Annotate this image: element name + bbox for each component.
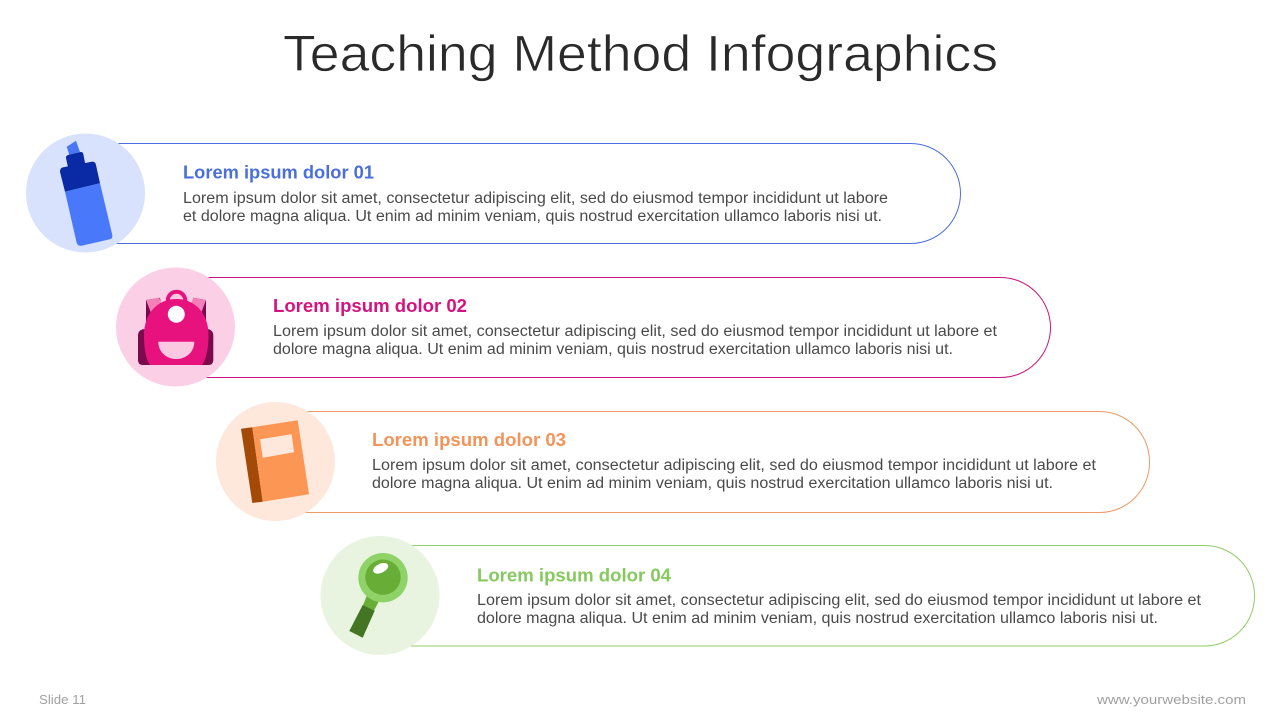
pill outline 02 bbox=[150, 278, 1050, 378]
heading 02: Lorem ipsum dolor 02 bbox=[273, 295, 467, 316]
pill outline 01 bbox=[60, 144, 960, 244]
panel: item 03 bbox=[216, 402, 1150, 521]
body text 02 bbox=[273, 323, 998, 358]
body text 01: Lorem ipsum dolor sit amet, consectetur adipiscing elit, sed do eiusmod tempor incididunt ut labore bbox=[183, 190, 888, 207]
body text 02: Lorem ipsum dolor sit amet, consectetur adipiscing elit, sed do eiusmod tempor incididunt ut labore et bbox=[273, 323, 998, 340]
body text 04: dolore magna aliqua. Ut enim ad minim veniam, quis nostrud exercitation ullamco laboris nisi ut. bbox=[477, 610, 1158, 627]
body text 02: dolore magna aliqua. Ut enim ad minim veniam, quis nostrud exercitation ullamco laboris nisi ut. bbox=[273, 341, 953, 358]
icon: magnifying glass bbox=[320, 536, 440, 655]
pill outline 04 bbox=[355, 546, 1254, 646]
icon: notebook bbox=[216, 402, 335, 521]
footer: website: www.yourwebsite.com bbox=[1096, 693, 1246, 707]
icon: marker pen bbox=[26, 134, 145, 252]
heading 04: Lorem ipsum dolor 04 bbox=[477, 564, 672, 586]
panel: item 04 bbox=[320, 536, 1254, 655]
body text 03: dolore magna aliqua. Ut enim ad minim veniam, quis nostrud exercitation ullamco laboris nisi ut. bbox=[372, 475, 1053, 492]
body text 04 bbox=[477, 592, 1202, 627]
footer: slide number: Slide 11 bbox=[39, 693, 86, 707]
heading 03: Lorem ipsum dolor 03 bbox=[372, 429, 566, 450]
body text 01 bbox=[183, 190, 888, 225]
body text 03 bbox=[372, 457, 1097, 492]
heading 01: Lorem ipsum dolor 01 bbox=[183, 162, 374, 182]
title: Teaching Method Infographics bbox=[283, 25, 998, 82]
icon: backpack bbox=[116, 268, 235, 386]
panel: item 01 bbox=[26, 134, 960, 252]
body text 04: Lorem ipsum dolor sit amet, consectetur adipiscing elit, sed do eiusmod tempor incididunt ut labore et bbox=[477, 592, 1202, 609]
body text 01: et dolore magna aliqua. Ut enim ad minim veniam, quis nostrud exercitation ullamco laboris nisi ut. bbox=[183, 208, 882, 225]
pill outline 03 bbox=[250, 412, 1150, 512]
panel: item 02 bbox=[116, 268, 1050, 386]
body text 03: Lorem ipsum dolor sit amet, consectetur adipiscing elit, sed do eiusmod tempor incididunt ut labore et bbox=[372, 457, 1097, 474]
